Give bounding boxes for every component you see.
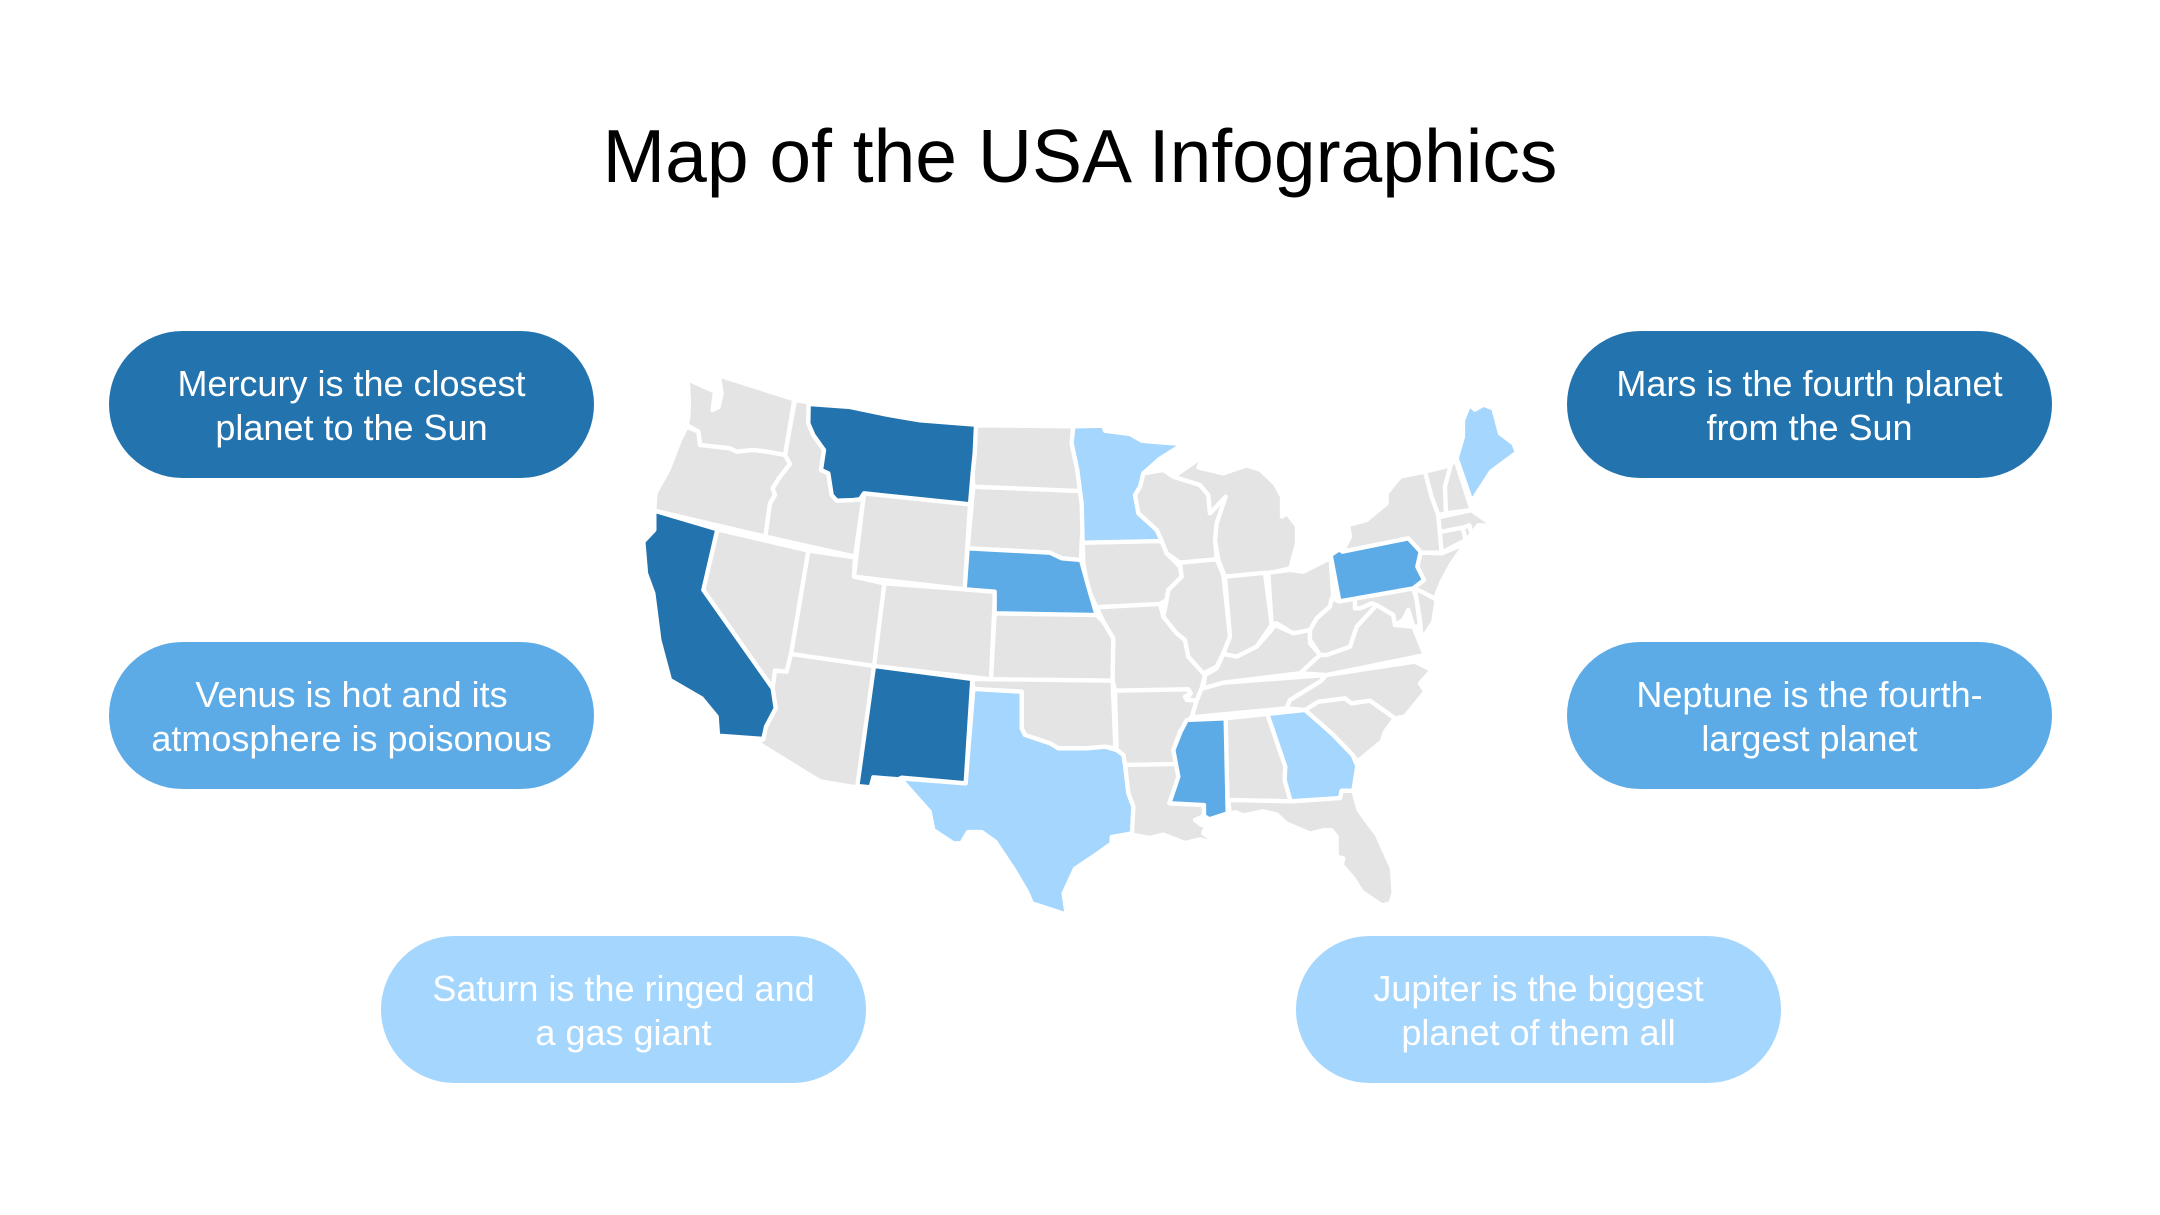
state: Nevada: [703, 529, 808, 688]
state: Alabama: [1226, 714, 1291, 813]
callout: Saturn: Saturn is the ringed and: [432, 968, 815, 1009]
state: Nebraska: [965, 548, 1097, 615]
state: Minnesota: [1072, 426, 1183, 543]
state: Montana: [808, 404, 976, 504]
callout: Jupiter: planet of them all: [1401, 1012, 1676, 1052]
state: Washington: [687, 375, 794, 455]
callout: Neptune: largest planet: [1701, 718, 1918, 758]
state: North Dakota: [973, 425, 1080, 491]
callout: Mercury: [109, 331, 594, 478]
state: New York: [1343, 472, 1442, 553]
state: Idaho: [765, 400, 864, 557]
state: Virginia: [1300, 603, 1425, 675]
state: Mississippi: [1169, 718, 1228, 819]
state: Pennsylvania: [1331, 538, 1424, 601]
state: South Dakota: [968, 487, 1084, 560]
state: Maine: [1457, 405, 1517, 502]
state: Ohio: [1268, 558, 1333, 633]
state: Michigan: [1173, 455, 1297, 577]
callout: Mars: Mars is the fourth planet: [1616, 363, 2003, 404]
state: Illinois: [1163, 559, 1230, 673]
title: Map of the USA Infographics: [603, 114, 1557, 198]
state: Arizona: [758, 654, 874, 788]
callout: Mars: [1567, 331, 2052, 478]
callout: Mercury: planet to the Sun: [215, 406, 488, 448]
state: Georgia: [1267, 710, 1357, 801]
callout: Venus: atmosphere is poisonous: [151, 718, 552, 758]
state: Massachusetts: [1438, 510, 1494, 537]
state: New Jersey: [1413, 543, 1466, 599]
callout: Saturn: a gas giant: [535, 1012, 712, 1052]
state: Maryland: [1355, 588, 1420, 627]
state: West Virginia: [1310, 598, 1377, 655]
callout: Mercury: Mercury is the closest: [177, 363, 526, 404]
state: Vermont: [1425, 465, 1451, 515]
state: Wisconsin: [1135, 470, 1226, 563]
callout: Neptune: Neptune is the fourth-: [1636, 674, 1983, 715]
callout: Jupiter: Jupiter is the biggest: [1373, 968, 1704, 1009]
state: Iowa: [1083, 541, 1182, 607]
state: Indiana: [1223, 573, 1272, 657]
state: Kentucky: [1203, 625, 1320, 688]
state: Utah: [791, 551, 884, 666]
state: New Mexico: [857, 666, 972, 787]
callout: Mars: from the Sun: [1706, 406, 1913, 448]
state: Rhode Island: [1463, 525, 1472, 540]
state: Oregon: [654, 427, 790, 537]
callout: Venus: Venus is hot and its: [195, 674, 508, 715]
state: Kansas: [991, 613, 1113, 681]
state: Wyoming: [854, 493, 970, 589]
state: Florida: [1228, 791, 1394, 905]
state: New Hampshire: [1445, 458, 1472, 513]
state: Connecticut: [1440, 528, 1466, 553]
state: Oklahoma: [972, 679, 1115, 748]
state: Missouri: [1097, 604, 1205, 701]
state: Tennessee: [1192, 675, 1327, 717]
callout: Neptune: [1567, 642, 2052, 789]
state: South Carolina: [1305, 698, 1395, 762]
callout: Saturn: [381, 936, 866, 1083]
state: Delaware: [1415, 590, 1437, 640]
state: Texas: [900, 689, 1133, 915]
state: Arkansas: [1115, 689, 1197, 765]
state: California: [643, 511, 776, 739]
state: North Carolina: [1287, 662, 1432, 718]
state: Colorado: [874, 583, 995, 679]
callout: Jupiter: [1296, 936, 1781, 1083]
state: Louisiana: [1125, 764, 1220, 845]
callout: Venus: [109, 642, 594, 789]
